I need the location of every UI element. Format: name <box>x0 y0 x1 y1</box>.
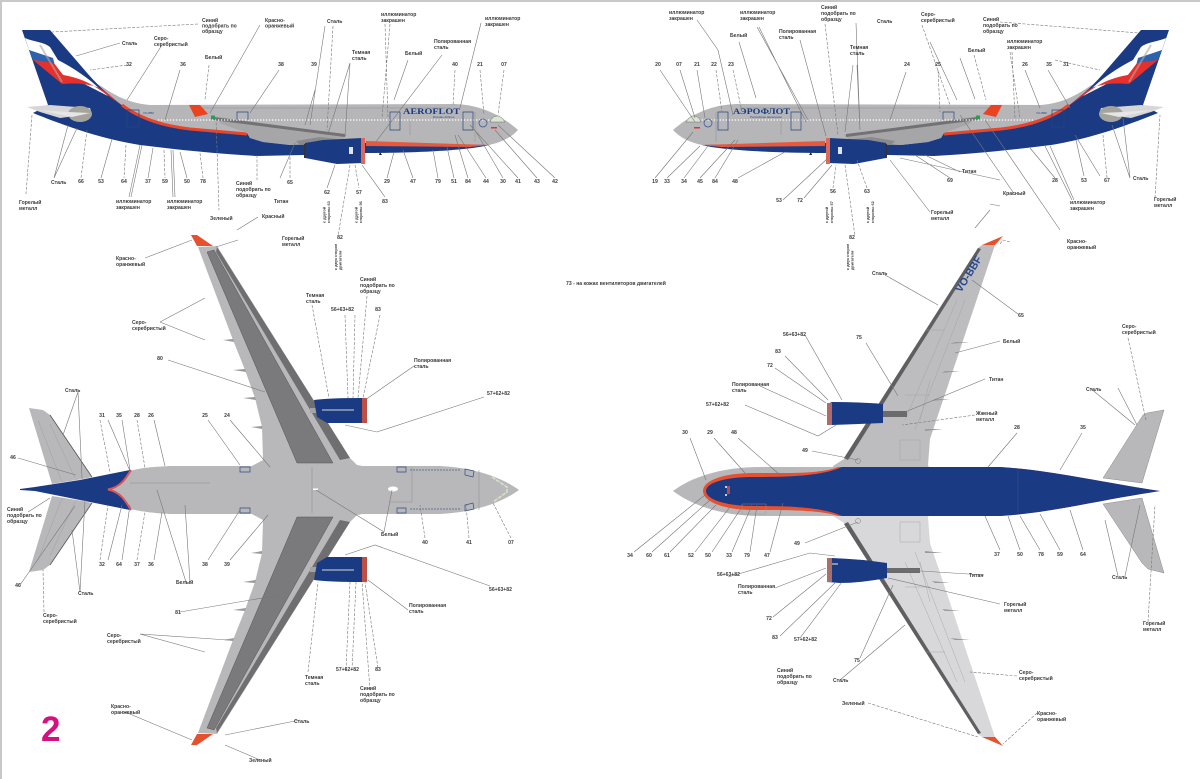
leader lines: side right <box>655 20 1130 230</box>
color callouts: side left: оранжевый <box>265 22 294 30</box>
part numbers: side left: 53 <box>98 179 104 185</box>
color callouts: side left: закрашен <box>485 22 509 28</box>
color callouts: belly view: Красно- <box>1067 239 1087 245</box>
part numbers: side left: 66 <box>78 179 84 185</box>
part numbers: side left: 57 <box>356 190 362 196</box>
part numbers: top view: 40 <box>422 540 428 546</box>
color callouts: belly view: Титан <box>969 573 983 579</box>
color callouts: top view: образцу <box>360 697 381 704</box>
color callouts: side left: металл <box>19 206 37 212</box>
part numbers: side left: 21 <box>477 62 483 68</box>
part numbers: side right: 31 <box>1063 62 1069 68</box>
part numbers: top view: 56+63+82 <box>489 587 512 593</box>
color callouts: side left: Темная <box>352 50 370 56</box>
rotated notes: side right: стороны 57 <box>830 201 834 223</box>
color callouts: top view: оранжевый <box>116 261 145 268</box>
color callouts: side right: Полированная <box>779 29 816 35</box>
color callouts: top view: Красно- <box>116 256 136 262</box>
part numbers: side right: 53 <box>1081 178 1087 184</box>
part numbers: top view: 32 <box>99 562 105 568</box>
part numbers: side right: 34 <box>681 179 687 185</box>
part numbers: side left: 51 <box>451 179 457 185</box>
color callouts: side right: иллюминатор <box>669 10 704 16</box>
color callouts: side left: Белый <box>205 54 222 61</box>
rotated notes: side right: с другой <box>866 206 870 223</box>
color callouts: belly view: Горелый <box>1004 602 1026 608</box>
color callouts: top view: образцу <box>360 288 381 295</box>
color callouts: top view: Синий <box>360 277 376 283</box>
upper engine <box>827 402 907 425</box>
part numbers: side right: 07 <box>676 62 682 68</box>
color callouts: side left: Синий <box>202 18 218 24</box>
rotated notes: side right: с другой <box>825 206 829 223</box>
color callouts: side left: Серо- <box>154 36 168 42</box>
color callouts: top view: Сталь <box>78 591 93 597</box>
part numbers: belly view: 61 <box>664 553 670 559</box>
color callouts: side right: закрашен <box>1007 45 1031 51</box>
color callouts: side right: Темная <box>850 45 868 51</box>
part numbers: side left: 42 <box>552 179 558 185</box>
color callouts: side right: Серо- <box>921 12 935 18</box>
part numbers: belly view: 72 <box>766 616 772 622</box>
part numbers: side right: 69 <box>947 178 953 184</box>
color callouts: side left: подобрать по <box>202 22 237 30</box>
part numbers: belly view: 57+62+82 <box>794 637 817 643</box>
color callouts: side right: Сталь <box>877 19 892 25</box>
part numbers: side left: 59 <box>162 179 168 185</box>
color callouts: top view: Сталь <box>65 388 80 394</box>
color callouts: side right: иллюминатор <box>1070 200 1105 206</box>
color callouts: belly view: Полированная <box>732 382 769 388</box>
color callouts: side right: металл <box>931 216 949 222</box>
part numbers: top view: 38 <box>202 562 208 568</box>
color callouts: belly view: Красно- <box>1037 711 1057 717</box>
color callouts: side left: иллюминатор <box>381 12 416 18</box>
page number: 2 <box>41 710 60 749</box>
part numbers: belly view: 79 <box>744 553 750 559</box>
part numbers: top view: 83 <box>375 307 381 313</box>
color callouts: top view: Сталь <box>294 719 309 725</box>
color callouts: side left: серебристый <box>154 41 188 48</box>
part numbers: top view: 57+62+82 <box>336 667 359 673</box>
color callouts: belly view: серебристый <box>1122 329 1156 336</box>
part numbers: side right: 21 <box>694 62 700 68</box>
color callouts: top view: Синий <box>360 686 376 692</box>
color callouts: belly view: оранжевый <box>1067 244 1096 251</box>
rotated notes: side left: стороны 56 <box>359 201 363 223</box>
color callouts: side right: металл <box>1154 203 1172 209</box>
Russian subtitle: Российские авиалинии <box>750 115 782 119</box>
part numbers: belly view: 28 <box>1014 425 1020 431</box>
rotated notes: side left: с другой <box>322 206 326 223</box>
part numbers: side left: 07 <box>501 62 507 68</box>
rotated notes: side left: стороны 63 <box>327 201 331 223</box>
color callouts: side left: Красный <box>262 213 284 220</box>
part numbers: side right: 45 <box>697 179 703 185</box>
part numbers: side left: 82 <box>337 235 343 241</box>
part numbers: belly view: 64 <box>1080 552 1086 558</box>
dashed leader lines: top view <box>43 296 511 690</box>
color callouts: side left: Красно- <box>265 18 285 24</box>
part numbers: top view: 24 <box>224 413 230 419</box>
color callouts: belly view: металл <box>1143 627 1161 633</box>
part numbers: belly view: 50 <box>705 553 711 559</box>
dashed leader lines: belly view <box>868 240 1155 744</box>
panel: side view right <box>652 4 1176 270</box>
color callouts: belly view: металл <box>976 417 994 423</box>
color callouts: side left: иллюминатор <box>485 16 520 22</box>
panel: side view left <box>19 12 558 270</box>
part numbers: side left: 79 <box>435 179 441 185</box>
color callouts: belly view: образцу <box>777 679 798 686</box>
color callouts: side right: Горелый <box>931 210 953 216</box>
part numbers: side right: 19 <box>652 179 658 185</box>
color callouts: side left: металл <box>282 242 300 248</box>
panel: top view <box>7 235 519 764</box>
color callouts: side left: образцу <box>236 192 257 199</box>
color callouts: side right: Красный <box>1003 190 1025 197</box>
part numbers: belly view: 33 <box>726 553 732 559</box>
part numbers: side left: 47 <box>410 179 416 185</box>
color callouts: side left: Белый <box>405 50 422 57</box>
lower wing and engine <box>191 513 368 745</box>
color callouts: top view: серебристый <box>132 325 166 332</box>
part numbers: side right: 56 <box>830 189 836 195</box>
part numbers: side left: 38 <box>278 62 284 68</box>
part numbers: side right: 25 <box>935 62 941 68</box>
color callouts: belly view: Сталь <box>833 678 848 684</box>
color callouts: top view: Зеленый <box>249 757 272 764</box>
color callouts: top view: образцу <box>7 518 28 525</box>
color callouts: side right: Сталь <box>1133 176 1148 182</box>
color callouts: top view: Серо- <box>132 320 146 326</box>
color callouts: top view: Красно- <box>111 704 131 710</box>
part numbers: side right: 84 <box>712 179 718 185</box>
color callouts: belly view: Белый <box>1003 338 1020 345</box>
color callouts: top view: Темная <box>305 675 323 681</box>
registration on rear fuselage: VO-BBF <box>1036 111 1047 115</box>
part numbers: belly view: 29 <box>707 430 713 436</box>
color callouts: side left: Полированная <box>434 39 471 45</box>
leader lines: side left <box>54 23 555 230</box>
lower engine <box>827 558 920 583</box>
aircraft side view nose left <box>673 30 1169 164</box>
color callouts: top view: сталь <box>306 299 321 305</box>
part numbers: belly view: 65 <box>1018 313 1024 319</box>
rotated notes: side right: двигателя <box>850 251 854 270</box>
part numbers: side left: 78 <box>200 179 206 185</box>
part numbers: belly view: 50 <box>1017 552 1023 558</box>
color callouts: side right: Синий <box>983 17 999 23</box>
color callouts: side right: Белый <box>968 47 985 54</box>
Russian Airlines subtitle: Russian Airlines <box>433 115 455 119</box>
part numbers: side left: 84 <box>465 179 471 185</box>
part numbers: belly view <box>627 313 1086 664</box>
lower wing underside <box>833 512 1003 746</box>
color callouts: side left: сталь <box>434 45 449 51</box>
color callouts: top view: подобрать по <box>360 282 395 289</box>
part numbers: belly view: 83 <box>772 635 778 641</box>
color callouts: belly view: сталь <box>738 590 753 596</box>
part numbers: top view: 26 <box>148 413 154 419</box>
color callouts: side right: образцу <box>821 16 842 23</box>
dashed leader lines: side right <box>716 22 1160 236</box>
part numbers: belly view: 47 <box>764 553 770 559</box>
color callouts: side right: сталь <box>850 51 865 57</box>
color callouts: side right: закрашен <box>1070 206 1094 212</box>
part numbers: side left: 43 <box>534 179 540 185</box>
color callouts: side left: подобрать по <box>236 186 271 193</box>
upper tailplane <box>29 408 92 484</box>
color callouts: top view: сталь <box>409 609 424 615</box>
color callouts: side right: Синий <box>821 5 837 11</box>
part numbers: side left <box>78 62 558 241</box>
part numbers: top view: 28 <box>134 413 140 419</box>
color callouts: side right: закрашен <box>669 16 693 22</box>
part numbers: top view: 07 <box>508 540 514 546</box>
part numbers: side left: 64 <box>121 179 127 185</box>
part numbers: side right: 28 <box>1052 178 1058 184</box>
part numbers: side right: 53 <box>776 198 782 204</box>
color callouts: top view: Синий <box>7 507 23 513</box>
part numbers: side left: 65 <box>287 180 293 186</box>
registration on rear fuselage: VO-BBF <box>143 111 154 115</box>
part numbers: side right: 22 <box>711 62 717 68</box>
part numbers: top view: 41 <box>466 540 472 546</box>
part numbers: top view <box>10 307 514 673</box>
part numbers: side right: 26 <box>1022 62 1028 68</box>
color callouts: top view: Серо- <box>43 613 57 619</box>
part numbers: side right: 20 <box>655 62 661 68</box>
color callouts: side left <box>19 12 520 248</box>
part numbers: belly view: 52 <box>688 553 694 559</box>
part numbers: top view: 57+62+82 <box>487 391 510 397</box>
color callouts: side left: закрашен <box>381 18 405 24</box>
rotated notes: side right <box>825 201 875 270</box>
upper wing underside <box>833 236 1003 470</box>
color callouts: belly view: сталь <box>732 388 747 394</box>
Russian titling: АЭРОФЛОТ <box>733 107 791 116</box>
fuselage underside <box>673 467 1160 516</box>
color callouts: top view: Полированная <box>414 358 451 364</box>
color callouts: side left: закрашен <box>116 205 140 211</box>
panel: belly view <box>627 236 1165 746</box>
color callouts: belly view: Серо- <box>1019 670 1033 676</box>
part numbers: side left: 32 <box>126 62 132 68</box>
color callouts: belly view: подобрать по <box>777 673 812 680</box>
color callouts: side left: иллюминатор <box>116 199 151 205</box>
part numbers: belly view: 78 <box>1038 552 1044 558</box>
note: fan spinners: 73 - на кожах вентиляторов двигателей <box>566 280 666 287</box>
color callouts: top view: подобрать по <box>7 512 42 519</box>
part numbers: side left: 44 <box>483 179 489 185</box>
part numbers: top view: 35 <box>116 413 122 419</box>
part numbers: side right: 82 <box>849 235 855 241</box>
part numbers: belly view: 34 <box>627 553 633 559</box>
part numbers: top view: 39 <box>224 562 230 568</box>
part numbers: top view: 31 <box>99 413 105 419</box>
color callouts: top view: сталь <box>305 681 320 687</box>
color callouts: belly view: Сталь <box>1112 575 1127 581</box>
part numbers: top view: 80 <box>157 356 163 362</box>
color callouts: side left: Сталь <box>122 41 137 47</box>
lower tailplane underside <box>1103 498 1164 573</box>
color callouts: top view: Белый <box>381 531 398 538</box>
part numbers: side right: 24 <box>904 62 910 68</box>
part numbers: side right: 63 <box>864 189 870 195</box>
part numbers: belly view: 48 <box>731 430 737 436</box>
part numbers: top view: 37 <box>134 562 140 568</box>
part numbers: belly view: 56+63+82 <box>717 572 740 578</box>
color callouts: top view: Белый <box>176 579 193 586</box>
color callouts: top view: серебристый <box>107 638 141 645</box>
color callouts: side left: Сталь <box>327 19 342 25</box>
color callouts: side right: Горелый <box>1154 197 1176 203</box>
color callouts: side right: сталь <box>779 35 794 41</box>
part numbers: top view: 83 <box>375 667 381 673</box>
rotated notes: side right: стороны 62 <box>871 201 875 223</box>
lower tailplane <box>29 496 92 572</box>
color callouts: side right: серебристый <box>921 17 955 24</box>
color callouts: top view: серебристый <box>43 618 77 625</box>
color callouts: belly view: Жженый <box>976 411 998 417</box>
part numbers: side right: 23 <box>728 62 734 68</box>
part numbers: side left: 39 <box>311 62 317 68</box>
color callouts: belly view: Сталь <box>1086 387 1101 393</box>
color callouts: side left: Титан <box>274 199 288 205</box>
part numbers: belly view: 37 <box>994 552 1000 558</box>
color callouts: belly view: Синий <box>777 668 793 674</box>
color callouts: side left: образцу <box>202 28 223 35</box>
color callouts: belly view: Серо- <box>1122 324 1136 330</box>
color callouts: belly view: металл <box>1004 608 1022 614</box>
part numbers: belly view: 72 <box>767 363 773 369</box>
part numbers: side right: 33 <box>664 179 670 185</box>
color callouts: belly view: Сталь <box>872 271 887 277</box>
rotated notes: side left: двигателя <box>338 251 342 270</box>
part numbers: belly view: 57+62+82 <box>706 402 729 408</box>
part numbers: belly view: 35 <box>1080 425 1086 431</box>
rotated notes: side right: с двух сторон <box>846 243 850 270</box>
part numbers: belly view: 59 <box>1057 552 1063 558</box>
AEROFLOT titling: AEROFLOT <box>403 107 461 116</box>
color callouts: side left: сталь <box>352 56 367 62</box>
upper tailplane underside <box>1103 410 1164 483</box>
part numbers: side right: 48 <box>732 179 738 185</box>
color callouts: side right: Белый <box>730 32 747 39</box>
color callouts: top view: Серо- <box>107 633 121 639</box>
part numbers: side left: 83 <box>382 199 388 205</box>
part numbers: top view: 64 <box>116 562 122 568</box>
leader lines: top view <box>18 240 490 760</box>
part numbers: side right <box>652 62 1110 241</box>
part numbers: side left: 41 <box>515 179 521 185</box>
color callouts: belly view: оранжевый <box>1037 716 1066 723</box>
color callouts: belly view: Титан <box>989 377 1003 383</box>
part numbers: side left: 62 <box>324 190 330 196</box>
color callouts: top view: оранжевый <box>111 709 140 716</box>
part numbers: top view: 46 <box>10 455 16 461</box>
color callouts: side left: Синий <box>236 181 252 187</box>
part numbers: side left: 30 <box>500 179 506 185</box>
part numbers: belly view: 49 <box>802 448 808 454</box>
color callouts: side right: иллюминатор <box>740 10 775 16</box>
part numbers: top view: 81 <box>175 610 181 616</box>
color callouts: side left: иллюминатор <box>167 199 202 205</box>
color callouts: side left: закрашен <box>167 205 191 211</box>
part numbers: belly view: 83 <box>775 349 781 355</box>
color callouts: side left: Горелый <box>19 200 41 206</box>
part numbers: belly view: 49 <box>794 541 800 547</box>
aircraft side view nose right <box>22 30 518 164</box>
color callouts: side right: закрашен <box>740 16 764 22</box>
color callouts: top view: сталь <box>414 364 429 370</box>
color callouts: side right: Титан <box>962 169 976 175</box>
color callouts: top view <box>7 256 451 764</box>
color callouts: side right: образцу <box>983 28 1004 35</box>
color callouts: belly view: серебристый <box>1019 675 1053 682</box>
dashed leader lines: side left <box>26 24 504 236</box>
color callouts: top view: подобрать по <box>360 691 395 698</box>
part numbers: belly view: 56+63+82 <box>783 332 806 338</box>
part numbers: top view: 56+63+82 <box>331 307 354 313</box>
part numbers: side right: 72 <box>797 198 803 204</box>
fuselage top <box>20 466 519 514</box>
part numbers: belly view: 30 <box>682 430 688 436</box>
rotated notes: side left <box>322 201 363 270</box>
color callouts: top view: Полированная <box>409 603 446 609</box>
part numbers: top view: 36 <box>148 562 154 568</box>
color callouts: side right <box>669 4 1176 222</box>
leader lines: belly view <box>634 275 1140 680</box>
color callouts: belly view: Зеленый <box>842 700 865 707</box>
part numbers: belly view: 75 <box>854 658 860 664</box>
rotated notes: side left: с другой <box>354 206 358 223</box>
part numbers: side right: 67 <box>1104 178 1110 184</box>
part numbers: side left: 29 <box>384 179 390 185</box>
part numbers: top view: 25 <box>202 413 208 419</box>
part numbers: belly view: 60 <box>646 553 652 559</box>
color callouts: side left: Сталь <box>51 180 66 186</box>
color callouts: side right: подобрать по <box>983 22 1018 29</box>
color callouts: belly view: Полированная <box>738 584 775 590</box>
color callouts: side left: Горелый <box>282 236 304 242</box>
part numbers: side left: 50 <box>184 179 190 185</box>
part numbers: side left: 36 <box>180 62 186 68</box>
part numbers: top view: 46 <box>15 583 21 589</box>
upper wing and engine <box>191 235 368 467</box>
part numbers: side right: 35 <box>1046 62 1052 68</box>
color callouts: belly view: Горелый <box>1143 621 1165 627</box>
color callouts: side left: Зеленый <box>210 215 233 222</box>
color callouts: top view: Темная <box>306 293 324 299</box>
color callouts: side right: иллюминатор <box>1007 39 1042 45</box>
color callouts: belly view <box>732 239 1165 723</box>
color callouts: side right: подобрать по <box>821 10 856 17</box>
part numbers: side left: 37 <box>145 179 151 185</box>
rotated notes: side left: с двух сторон <box>334 243 338 270</box>
part numbers: belly view: 75 <box>856 335 862 341</box>
wing registration: VO-BBF <box>953 254 985 295</box>
part numbers: side left: 40 <box>452 62 458 68</box>
